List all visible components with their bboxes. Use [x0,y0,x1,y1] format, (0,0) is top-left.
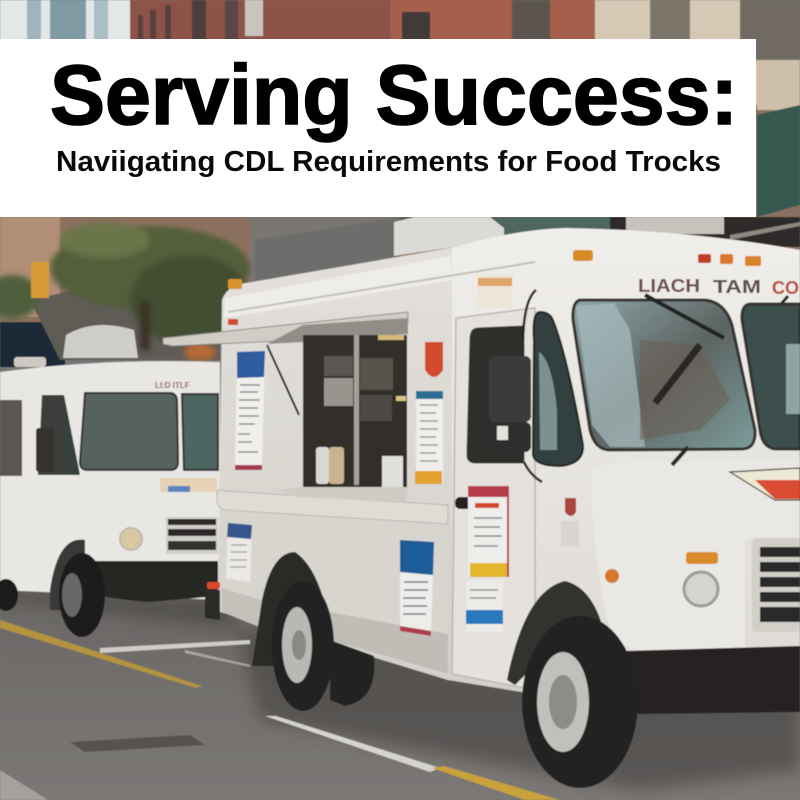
side mirror [487,290,542,482]
awning [163,312,408,346]
ribbed skirt [222,588,262,628]
cab [452,228,800,685]
door window [467,326,524,463]
red shield sticker [425,342,443,377]
left food truck [0,325,220,637]
road surface [0,590,800,800]
second windshield [742,304,800,449]
main truck body [163,217,800,788]
grille left truck [166,517,218,554]
poster: red header [468,486,509,577]
cab window reflections [539,352,557,450]
poster: blue left upper [235,351,265,470]
body trim strip [217,490,448,524]
poster: blue-orange panel [415,391,443,484]
poster: lower left [226,523,252,582]
awning strut [267,345,299,415]
rear lights [207,582,220,589]
windshield left truck [80,393,178,470]
left food truck: LI:D ITLF [155,381,190,390]
front bumper [625,646,800,714]
turn signal and headlight [605,552,718,606]
main truck body: CO [772,278,799,298]
poster: blue lower door [466,580,503,632]
wipers [645,295,724,338]
hood [592,462,800,655]
service window [277,335,407,502]
roof highlight [224,256,453,318]
cab side window [533,312,583,466]
windshield reflection [576,303,645,447]
roof marker lights [573,250,761,266]
lower rear panel [220,510,448,676]
notice on upper door panel [477,274,513,308]
roof rail [228,262,535,312]
subtitle: Naviigating CDL Requirements for Food Trocks [56,146,721,178]
street sign [31,262,49,298]
truck name lettering: LIACH [638,276,700,296]
small badge stickers [561,498,622,556]
main title: Serving Success: [50,48,738,142]
box side [218,228,575,695]
door handle [455,497,473,509]
bumper left truck [85,561,218,602]
front wheel [507,581,638,788]
wheel left truck [50,540,85,610]
background: city buildings [0,0,800,367]
roof AC units [394,217,504,256]
rear wheel [252,552,374,711]
background: street tree [0,222,250,361]
hood logo badge [730,468,800,500]
grille [752,538,800,632]
main truck body: TAM [713,277,761,297]
poster: centre lower [400,540,434,636]
icon: roof AC unit [63,325,138,358]
title panel [0,39,756,217]
door [452,308,535,690]
windshield main [573,300,755,450]
